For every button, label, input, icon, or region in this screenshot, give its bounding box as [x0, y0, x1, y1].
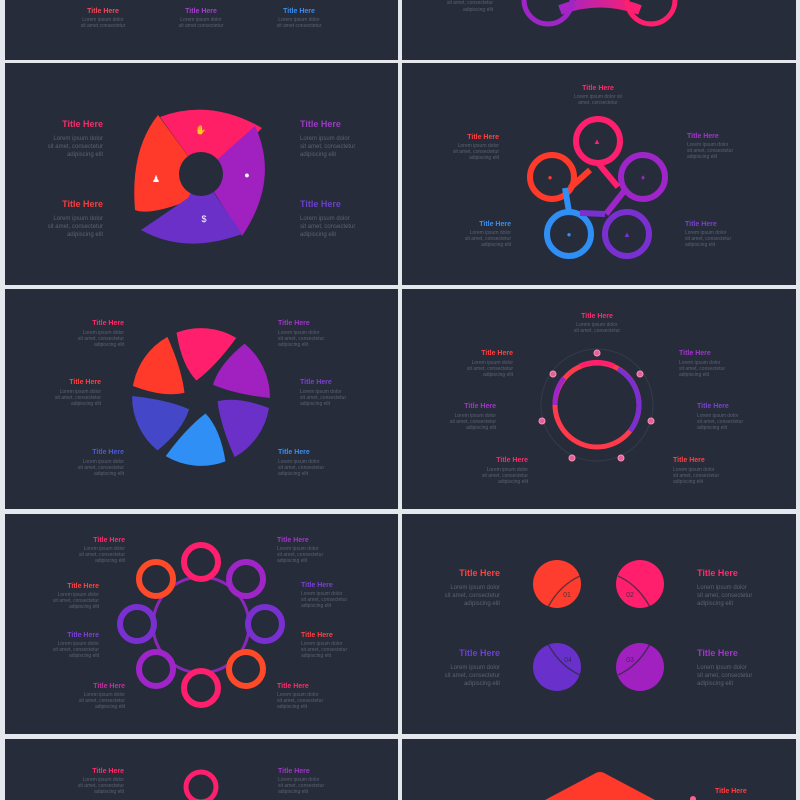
text blocks: Title Here — [277, 537, 309, 544]
icons: ♦ — [641, 173, 645, 182]
text blocks: Title Here — [278, 768, 310, 775]
text blocks: Title Here — [92, 320, 124, 327]
chart: partial loops — [524, 0, 675, 24]
text block: right: Title Here — [300, 119, 341, 129]
text blocks: Title Here — [459, 568, 500, 578]
text blocks: sit amet, consectetur — [301, 647, 347, 653]
text blocks: adipiscing elit — [679, 372, 710, 378]
text blocks: Title Here — [479, 221, 511, 228]
text blocks: Lorem ipsum dolor — [301, 641, 343, 647]
text blocks: sit amet, consectetur — [53, 647, 99, 653]
text blocks: adipiscing elit — [277, 558, 308, 564]
text blocks: Title Here — [581, 313, 613, 320]
text blocks: Title Here — [687, 133, 719, 140]
text blocks: adipiscing elit — [469, 155, 500, 161]
text blocks: adipiscing elit — [466, 425, 497, 431]
text blocks: Title Here — [67, 583, 99, 590]
text blocks: Lorem ipsum dolor — [450, 585, 500, 591]
text blocks: sit amet, consectetur — [277, 552, 323, 558]
text blocks: sit amet, consectetur — [277, 698, 323, 704]
text blocks: Lorem ipsum dolor — [278, 330, 320, 336]
text blocks: Title Here — [93, 537, 125, 544]
text blocks: Title Here — [673, 457, 705, 464]
text block: adipiscing elit — [463, 7, 494, 13]
text blocks: sit amet, consectetur — [278, 783, 324, 789]
text blocks: Lorem ipsum dolor sit — [574, 94, 623, 100]
text blocks: sit amet, consectetur — [450, 419, 496, 425]
text blocks: adipiscing elit — [673, 479, 704, 485]
text blocks: sit amet, consectetur — [482, 473, 528, 479]
text blocks: sit amet, consectetur — [453, 149, 499, 155]
text blocks: adipiscing elit — [277, 704, 308, 710]
icons: $ — [201, 214, 207, 224]
text blocks — [78, 768, 324, 795]
text block: sit amet, consectetur — [447, 0, 493, 6]
icon: ring — [186, 772, 216, 800]
panel: bottom-left slide — [5, 739, 398, 800]
text blocks: Title Here — [697, 403, 729, 410]
text block: three titles: sit amet consectetur — [277, 23, 322, 29]
text block: left: sit amet, consectetur — [48, 144, 103, 150]
text blocks: adipiscing elit — [464, 601, 500, 607]
text block: left: Title Here — [62, 119, 103, 129]
text blocks: Title Here — [93, 683, 125, 690]
text blocks: Title Here — [278, 320, 310, 327]
text blocks: adipiscing elit — [498, 479, 529, 485]
text blocks: adipiscing elit — [481, 242, 512, 248]
text block: left: Title Here — [62, 199, 103, 209]
text blocks: adipiscing elit — [94, 471, 125, 477]
chart: segmented ring — [541, 349, 653, 461]
icons: ▲ — [623, 230, 631, 239]
text blocks: sit amet, consectetur — [574, 328, 620, 334]
text blocks: Title Here — [685, 221, 717, 228]
text block: right: adipiscing elit — [300, 232, 336, 238]
text blocks: Lorem ipsum dolor — [455, 413, 496, 419]
icons: ▲ — [593, 137, 601, 146]
text blocks: sit amet, consectetur — [55, 395, 101, 401]
text block: three titles: Lorem ipsum dolor — [278, 17, 320, 23]
text blocks: Lorem ipsum dolor — [277, 692, 319, 698]
icons: ♟ — [152, 174, 160, 184]
text block: three titles: Title Here — [185, 8, 217, 15]
text blocks: adipiscing elit — [95, 704, 126, 710]
text blocks: adipiscing elit — [71, 401, 102, 407]
text blocks: Lorem ipsum dolor — [470, 230, 511, 236]
text blocks: adipiscing elit — [278, 789, 309, 795]
panel: bottom-right slide — [402, 739, 796, 800]
text blocks: Lorem ipsum dolor — [278, 459, 320, 465]
text blocks: Title Here — [92, 449, 124, 456]
text blocks: adipiscing elit — [69, 653, 100, 659]
text blocks: Lorem ipsum dolor — [83, 459, 124, 465]
chart: four numbered circles: 01 — [563, 592, 571, 599]
chart: four numbered circles: 03 — [626, 657, 634, 664]
text blocks: adipiscing elit — [94, 342, 125, 348]
panel: top-left slide — [5, 0, 398, 60]
text blocks: Lorem ipsum dolor — [300, 389, 342, 395]
text blocks: Title Here — [459, 648, 500, 658]
text blocks: Title Here — [679, 350, 711, 357]
icons: ✋ — [195, 124, 207, 135]
text block: three titles: Title Here — [87, 8, 119, 15]
title: Title Here — [715, 788, 747, 795]
panel: eight rings slide — [5, 514, 398, 734]
text blocks: sit amet, consectetur — [697, 419, 743, 425]
panel: pinwheel slide — [5, 289, 398, 509]
text blocks: sit amet, consectetur — [687, 148, 733, 154]
chart: five loops — [530, 119, 665, 256]
text blocks — [53, 537, 347, 710]
text block: left: Lorem ipsum dolor — [53, 216, 103, 222]
text block: right: sit amet, consectetur — [300, 224, 355, 230]
panel: top-right slide — [402, 0, 796, 60]
text block — [447, 0, 494, 13]
text blocks: adipiscing elit — [95, 558, 126, 564]
text blocks — [55, 320, 346, 477]
text block: left: adipiscing elit — [67, 232, 103, 238]
chart: four numbered circles — [533, 560, 664, 691]
chart: four numbered circles: 02 — [626, 592, 634, 599]
text block: left: sit amet, consectetur — [48, 224, 103, 230]
text blocks: Lorem ipsum dolor — [84, 546, 125, 552]
dot — [690, 796, 696, 800]
text blocks: sit amet, consectetur — [465, 236, 511, 242]
text blocks: Title Here — [697, 568, 738, 578]
text blocks: Title Here — [300, 379, 332, 386]
text blocks: sit amet, consectetur — [301, 597, 347, 603]
text block: right: adipiscing elit — [300, 152, 336, 158]
text blocks: Lorem ipsum dolor — [576, 322, 618, 328]
text blocks: adipiscing elit — [464, 681, 500, 687]
text block: right: Lorem ipsum dolor — [300, 136, 350, 142]
text blocks: adipiscing elit — [278, 471, 309, 477]
text blocks: adipiscing elit — [278, 342, 309, 348]
text blocks: adipiscing elit — [687, 154, 718, 160]
text blocks: sit amet, consectetur — [697, 593, 752, 599]
text blocks: Lorem ipsum dolor — [450, 665, 500, 671]
text blocks: Lorem ipsum dolor — [84, 692, 125, 698]
text blocks: Lorem ipsum dolor — [697, 665, 747, 671]
text block: right: Lorem ipsum dolor — [300, 216, 350, 222]
text block: left: adipiscing elit — [67, 152, 103, 158]
text blocks: Lorem ipsum dolor — [458, 143, 499, 149]
text blocks: sit amet, consectetur — [467, 366, 513, 372]
text blocks: adipiscing elit — [483, 372, 514, 378]
text blocks: sit amet, consectetur — [78, 465, 124, 471]
text blocks: Title Here — [481, 350, 513, 357]
text blocks: Lorem ipsum dolor — [278, 777, 320, 783]
text block: right: Title Here — [300, 199, 341, 209]
icons: ● — [244, 170, 250, 180]
text blocks: Title Here — [278, 449, 310, 456]
text blocks: sit amet, consectetur — [79, 698, 125, 704]
text block: three titles: sit amet consectetur — [179, 23, 224, 29]
text blocks: adipiscing elit — [301, 603, 332, 609]
text blocks: Lorem ipsum dolor — [60, 389, 101, 395]
text blocks — [445, 568, 752, 687]
panel: knot slide — [402, 63, 796, 285]
shape: red diamond — [545, 772, 655, 800]
text blocks: adipiscing elit — [300, 401, 331, 407]
text blocks: Lorem ipsum dolor — [687, 142, 729, 148]
text blocks: Title Here — [67, 632, 99, 639]
text block: right: sit amet, consectetur — [300, 144, 355, 150]
text blocks — [453, 85, 733, 248]
text blocks: adipiscing elit — [697, 425, 728, 431]
text blocks: sit amet, consectetur — [673, 473, 719, 479]
text blocks: Lorem ipsum dolor — [673, 467, 715, 473]
text blocks: Title Here — [277, 683, 309, 690]
text block: three titles: sit amet consectetur — [81, 23, 126, 29]
text blocks: Lorem ipsum dolor — [83, 777, 124, 783]
chart: four-part donut — [134, 110, 265, 244]
text blocks: Title Here — [464, 403, 496, 410]
text blocks: sit amet, consectetur — [300, 395, 346, 401]
text blocks: Title Here — [582, 85, 614, 92]
dots — [539, 350, 654, 461]
text blocks: Lorem ipsum dolor — [487, 467, 528, 473]
panel: four circles slide — [402, 514, 796, 734]
text blocks: sit amet, consectetur — [78, 783, 124, 789]
text blocks: Lorem ipsum dolor — [277, 546, 319, 552]
text blocks: sit amet, consectetur — [679, 366, 725, 372]
text blocks: Lorem ipsum dolor — [58, 592, 99, 598]
text block: left — [48, 119, 103, 238]
text blocks: Title Here — [697, 648, 738, 658]
text blocks: sit amet, consectetur — [78, 336, 124, 342]
text blocks: Lorem ipsum dolor — [83, 330, 124, 336]
text blocks: Lorem ipsum dolor — [58, 641, 99, 647]
text blocks: sit amet, consectetur — [53, 598, 99, 604]
text blocks: Lorem ipsum dolor — [685, 230, 727, 236]
icons: ● — [548, 173, 553, 182]
text blocks: Title Here — [301, 582, 333, 589]
text blocks: adipiscing elit — [69, 604, 100, 610]
text blocks: amet, consectetur — [578, 100, 618, 106]
text blocks: adipiscing elit — [697, 681, 733, 687]
icons: ● — [567, 230, 572, 239]
text block: three titles: Lorem ipsum dolor — [180, 17, 222, 23]
text block: three titles: Lorem ipsum dolor — [82, 17, 124, 23]
text blocks: sit amet, consectetur — [685, 236, 731, 242]
text blocks: sit amet, consectetur — [79, 552, 125, 558]
text block: right — [300, 119, 355, 238]
text blocks: Title Here — [467, 134, 499, 141]
text blocks: Title Here — [496, 457, 528, 464]
text blocks: Title Here — [69, 379, 101, 386]
chart: eight rings — [120, 545, 282, 705]
text block: three titles — [81, 8, 322, 29]
text blocks: sit amet, consectetur — [278, 336, 324, 342]
text blocks: Title Here — [92, 768, 124, 775]
text blocks: sit amet, consectetur — [278, 465, 324, 471]
text block: left: Lorem ipsum dolor — [53, 136, 103, 142]
text blocks: Lorem ipsum dolor — [472, 360, 513, 366]
icons — [548, 137, 645, 239]
chart: six-blade pinwheel — [126, 326, 276, 468]
text blocks: adipiscing elit — [685, 242, 716, 248]
text blocks — [450, 313, 743, 485]
panel: ring slide — [402, 289, 796, 509]
text blocks: Lorem ipsum dolor — [301, 591, 343, 597]
text blocks: Title Here — [301, 632, 333, 639]
text blocks: adipiscing elit — [301, 653, 332, 659]
panel: donut slide — [5, 63, 398, 285]
text blocks: Lorem ipsum dolor — [697, 585, 747, 591]
chart: four numbered circles: 04 — [564, 657, 572, 664]
text blocks: Lorem ipsum dolor — [697, 413, 739, 419]
icons — [152, 124, 250, 224]
text blocks: sit amet, consectetur — [445, 673, 500, 679]
text blocks: sit amet, consectetur — [697, 673, 752, 679]
text blocks: adipiscing elit — [94, 789, 125, 795]
text blocks: sit amet, consectetur — [445, 593, 500, 599]
text blocks: adipiscing elit — [697, 601, 733, 607]
text block: three titles: Title Here — [283, 8, 315, 15]
text blocks: Lorem ipsum dolor — [679, 360, 721, 366]
